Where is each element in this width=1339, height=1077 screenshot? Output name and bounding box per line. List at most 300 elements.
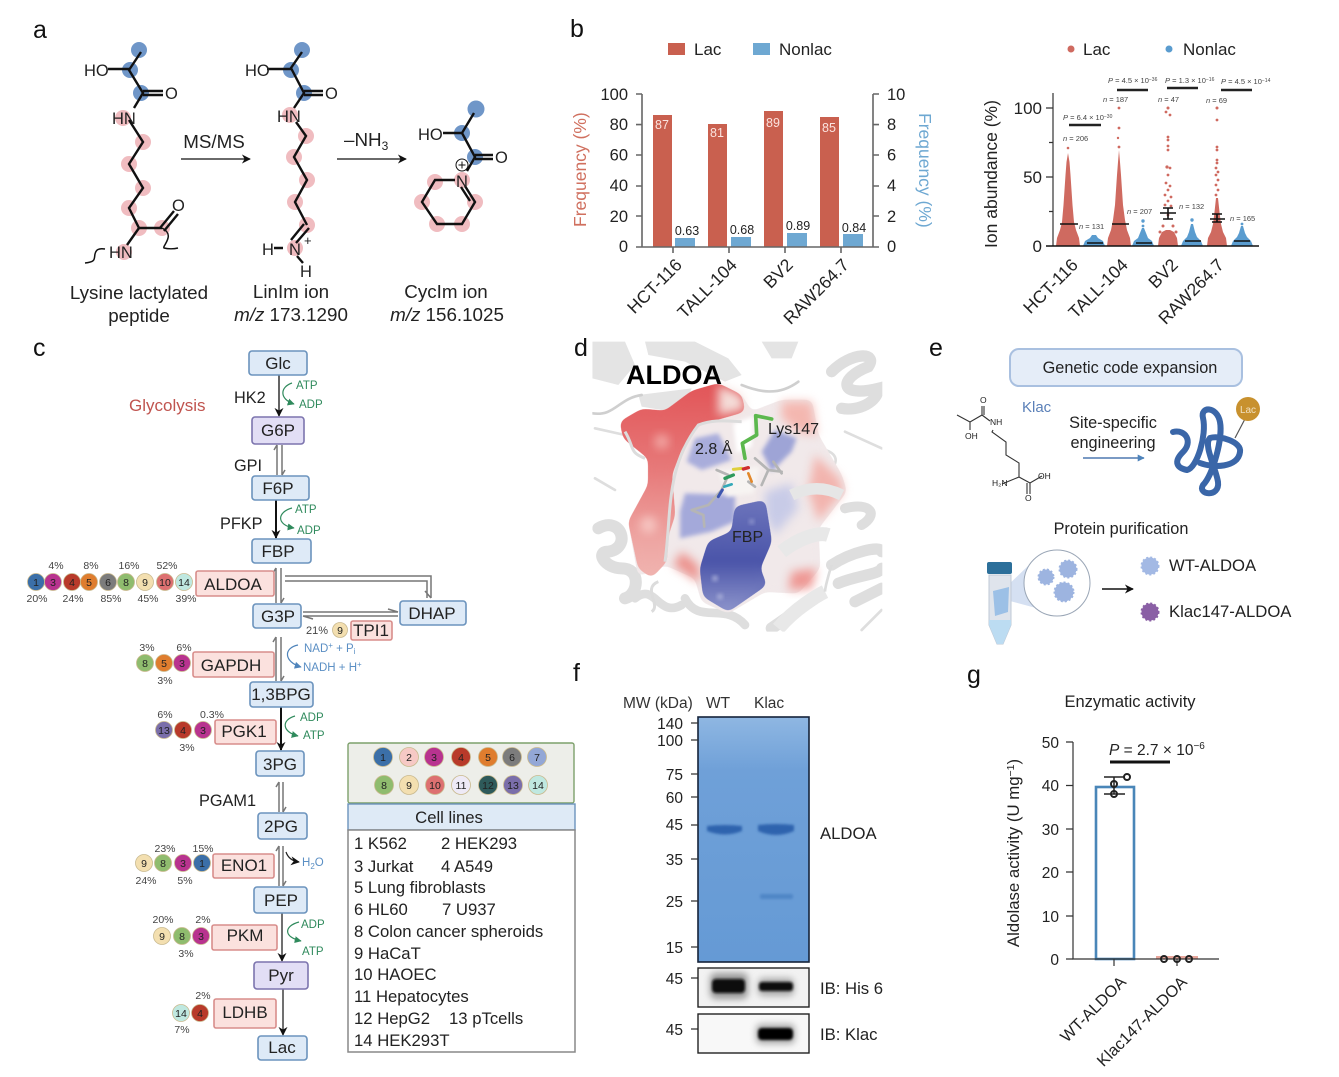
cell lines table: 12 HepG2 (354, 1009, 430, 1028)
ALDOA circle numbers and percentages: 24% (62, 593, 84, 605)
y tick labels: 0 (1050, 952, 1059, 969)
y tick labels (1042, 735, 1059, 969)
blot: His 6 (698, 968, 809, 1007)
n labels (1063, 95, 1255, 231)
x labels: TALL-104 (1064, 255, 1132, 322)
legend: Lac and Nonlac: Lac (694, 40, 722, 59)
cell lines table: 13 pTcells (449, 1009, 523, 1028)
y tick labels: 0 (1033, 237, 1042, 256)
ALDOA circle numbers and percentages: 20% (26, 593, 48, 605)
panel letter g: g (967, 661, 981, 689)
labels: ALDOA and blots (820, 824, 883, 1044)
PGK1 cell-line circles: 0.3% (200, 709, 224, 721)
panel letter f: f (573, 659, 580, 687)
GAPDH cell-line circles (136, 642, 192, 687)
cell lines table: 6 HL60 (354, 900, 408, 919)
label: site-specific engineering (1069, 414, 1157, 452)
P values: P = 4.5 × 10 (1221, 77, 1262, 86)
y tick labels: 50 (1023, 168, 1042, 187)
cell line colour key: 5 (485, 752, 491, 764)
legend: Lac and Nonlac dots (1068, 40, 1236, 59)
icon: tube with magnified protein (987, 550, 1090, 644)
y tick labels: 100 (1014, 99, 1042, 118)
label: LinIm ion: m/z 173.1290 (234, 304, 348, 325)
purple metabolite boxes (252, 417, 308, 989)
ALDOA circle numbers and percentages: 8% (83, 560, 99, 572)
y tick labels: 10 (1042, 909, 1059, 926)
n labels: n = 206 (1063, 134, 1088, 143)
cell line colour key: 12 (482, 780, 494, 792)
cell line colour key: 1 (380, 752, 386, 764)
enzyme names: GPI (234, 457, 262, 475)
cell line colour key: 9 (406, 780, 412, 792)
cofactor labels: 2 (310, 862, 315, 871)
arrow: minus NH3: 3 (382, 139, 389, 153)
label: CycIm ion (390, 281, 504, 325)
molecule: Klac (957, 395, 1051, 503)
cell line colour key: 7 (534, 752, 540, 764)
arrow: MS/MS: MS/MS (183, 131, 245, 152)
red bar value labels: 89 (766, 116, 780, 130)
enzyme names: PFKP (220, 515, 263, 533)
y axis title: −1 (1005, 764, 1017, 776)
protein surface and ribbons (592, 342, 882, 630)
GAPDH cell-line circles: 3 (179, 658, 185, 670)
x labels: BV2 (1144, 255, 1182, 292)
enzyme boxes (193, 571, 392, 1028)
label: site-specific engineering: engineering (1070, 434, 1156, 452)
n labels: n = 69 (1206, 96, 1227, 105)
blue bar value labels (675, 219, 866, 238)
label: site-specific engineering: Site-specific (1069, 414, 1157, 432)
labels: ALDOA and blots: ALDOA (820, 824, 877, 843)
cofactor labels: O (315, 857, 324, 869)
ALDOA cell-line circles (28, 574, 192, 590)
ALDOA circle numbers and percentages: 52% (156, 560, 178, 572)
box labels: Pyr (268, 966, 294, 985)
blot: Klac (698, 1014, 809, 1053)
cofactor labels: H (302, 857, 310, 869)
box labels: G3P (261, 607, 295, 626)
arrow: minus NH3 (337, 129, 406, 159)
red bar value labels: 81 (710, 126, 724, 140)
label: FBP: FBP (732, 529, 763, 546)
PKM cell-line circles (152, 914, 211, 960)
x labels: Klac147-ALDOA (1094, 973, 1191, 1070)
molecule: LinIm ion: H (300, 263, 312, 281)
right axis tick labels (887, 86, 905, 256)
cell line colour key: 6 (509, 752, 515, 764)
cell line colour key: 2 (406, 752, 412, 764)
cell lines table: 2 HEK293 (441, 834, 517, 853)
PKM cell-line circles: 3% (178, 948, 194, 960)
molecule: lysine lactylated peptide: HN (109, 244, 133, 262)
cell line colour key: 14 (532, 780, 544, 792)
box labels: Lac (268, 1038, 296, 1057)
box labels: PEP (264, 891, 298, 910)
left axis tick labels: 20 (610, 208, 628, 226)
molecule: lysine lactylated peptide: O (172, 197, 185, 215)
molecule: lysine lactylated peptide: O (165, 85, 178, 103)
cell lines table: 5 Lung fibroblasts (354, 878, 486, 897)
red swarm points (1056, 106, 1227, 246)
data points and error bars (1104, 774, 1192, 962)
cofactor labels: NADH + H (303, 662, 357, 674)
panel b left: frequency bar chart (570, 15, 935, 328)
panel g: enzymatic activity bar chart (967, 661, 1219, 1070)
P values: −16 (1206, 77, 1215, 83)
PGK1 cell-line circles: 6% (157, 709, 173, 721)
cofactor labels: ATP (303, 730, 325, 742)
molecule: lysine lactylated peptide: HN (112, 110, 136, 128)
left axis tick labels: 0 (619, 238, 628, 256)
cofactor labels: i (354, 647, 356, 656)
labels: ALDOA and blots: IB: His 6 (820, 979, 883, 998)
left axis title: Frequency (%) (570, 112, 590, 227)
header: genetic code expansion: Genetic code expansion (1043, 359, 1217, 377)
x labels: RAW264.7 (1154, 255, 1228, 328)
blue bar value labels: 0.89 (786, 219, 810, 233)
box labels: ALDOA (204, 575, 262, 594)
panel b right: ion abundance scatter (981, 40, 1271, 328)
box labels: PKM (227, 926, 263, 945)
label: lysine lactylated peptide: Lysine lactylated (70, 282, 208, 303)
legend: Lac and Nonlac dots: Lac (1083, 40, 1111, 59)
panel c: glycolysis pathway (26, 334, 575, 1060)
n labels: n = 132 (1179, 202, 1204, 211)
right axis title: Frequency (%) (915, 113, 935, 228)
lane headers: MW (kDa) (623, 695, 693, 712)
TPI1 cell-line circle: 21% (306, 625, 328, 637)
cofactor labels: ADP (297, 525, 321, 537)
molecule: CycIm ion (414, 100, 508, 232)
cell line colour key (348, 743, 574, 803)
x labels: TALL-104 (673, 255, 741, 322)
MW labels: 15 (666, 940, 683, 957)
molecule: LinIm ion: HO (245, 62, 270, 80)
GAPDH cell-line circles: 5 (161, 658, 167, 670)
molecule: lysine lactylated peptide: HO (84, 62, 109, 80)
ALDOA circle numbers and percentages: 5 (86, 577, 92, 589)
cell line colour key: 4 (458, 752, 464, 764)
MW labels: 140 (657, 716, 683, 733)
ENO1 cell-line circles (135, 843, 214, 887)
ENO1 cell-line circles: 8 (160, 858, 166, 870)
molecule: CycIm ion: N (456, 173, 468, 191)
PKM cell-line circles: 8 (179, 931, 185, 943)
box labels: 3PG (263, 755, 297, 774)
cofactor labels: ATP (302, 946, 324, 958)
left axis tick labels: 80 (610, 116, 628, 134)
box labels: 2PG (264, 817, 298, 836)
ENO1 cell-line circles: 15% (192, 843, 214, 855)
left axis tick labels: 60 (610, 146, 628, 164)
label: Lys147: Lys147 (768, 421, 819, 438)
x labels: BV2 (759, 255, 797, 292)
y tick labels: 30 (1042, 822, 1059, 839)
axes (1066, 742, 1219, 966)
enzyme names: HK2 (234, 389, 266, 407)
right axis tick labels: 2 (887, 208, 896, 226)
significance bars (1069, 88, 1252, 125)
WT bar (1096, 787, 1134, 959)
y tick labels: 50 (1042, 735, 1059, 752)
molecule: LinIm ion: O (325, 85, 338, 103)
ALDOA circle numbers and percentages: 45% (137, 593, 159, 605)
right axis tick labels: 4 (887, 177, 896, 195)
y axis title: Aldolase activity (U mg (1004, 776, 1023, 947)
ENO1 cell-line circles: 9 (141, 858, 147, 870)
box labels: TPI1 (353, 621, 389, 640)
PKM cell-line circles: 9 (159, 931, 165, 943)
enzyme names: PGAM1 (199, 792, 256, 810)
ENO1 cell-line circles: 5% (177, 875, 193, 887)
label: lysine lactylated peptide (70, 282, 208, 326)
P values: P = 1.3 × 10 (1165, 76, 1206, 85)
label: protein purification: Protein purification (1054, 520, 1188, 538)
P values: P = 4.5 × 10 (1108, 76, 1149, 85)
cofactor labels: ADP (299, 399, 323, 411)
blue bar value labels: 0.68 (730, 223, 754, 237)
blue bars (675, 233, 863, 247)
ENO1 cell-line circles: 23% (154, 843, 176, 855)
MW ticks (691, 723, 698, 1029)
n labels: n = 165 (1230, 214, 1255, 223)
right axis tick labels: 8 (887, 116, 896, 134)
P values: −14 (1262, 78, 1271, 84)
legend: Lac and Nonlac (668, 40, 832, 59)
Klac147 bar (1156, 956, 1198, 959)
cell line colour key: 11 (456, 780, 467, 792)
TPI1 cell-line circle (306, 622, 348, 638)
y axis title: Ion abundance (%) (981, 100, 1001, 248)
legend: Lac and Nonlac: Nonlac (779, 40, 832, 59)
arrow: engineering (1083, 457, 1144, 459)
label: CycIm ion: CycIm ion (404, 281, 488, 302)
molecule: LinIm ion: N (289, 241, 301, 259)
ALDOA circle numbers and percentages: 16% (118, 560, 140, 572)
molecule: CycIm ion: HO (418, 126, 443, 144)
box labels (201, 354, 456, 1057)
ALDOA circle numbers and percentages: 4 (69, 577, 75, 589)
right axis tick labels: 6 (887, 146, 896, 164)
cell lines table: 9 HaCaT (354, 944, 421, 963)
ENO1 cell-line circles: 1 (199, 858, 205, 870)
PKM cell-line circles: 20% (152, 914, 174, 926)
ALDOA circle numbers and percentages: 8 (123, 577, 129, 589)
ALDOA circle numbers and percentages (26, 560, 197, 605)
panel letter a: a (33, 16, 47, 44)
ALDOA circle numbers and percentages: 1 (33, 577, 39, 589)
MW labels: 25 (666, 894, 683, 911)
MW labels: 60 (666, 790, 683, 807)
label: LinIm ion: LinIm ion (253, 281, 329, 302)
molecule: LinIm ion: HN (277, 108, 301, 126)
P values: −36 (1149, 77, 1158, 83)
cofactor labels: ADP (300, 712, 324, 724)
PGK1 cell-line circles: 3% (179, 742, 195, 754)
red bar value labels: 85 (822, 121, 836, 135)
MW labels: 45 (666, 971, 683, 988)
molecule: LinIm ion (245, 42, 338, 281)
molecule: Klac: OH (1038, 471, 1051, 481)
GAPDH cell-line circles: 6% (176, 642, 192, 654)
cell lines table: 4 A549 (441, 857, 493, 876)
panel letter d: d (574, 334, 588, 362)
panel letter b: b (570, 15, 584, 43)
box labels: LDHB (222, 1003, 268, 1022)
box labels: G6P (261, 421, 295, 440)
PKM cell-line circles: 2% (195, 914, 211, 926)
blue bar value labels: 0.63 (675, 224, 699, 238)
cell lines table: 14 HEK293T (354, 1031, 450, 1050)
Coomassie gel (698, 717, 809, 962)
ALDOA circle numbers and percentages: 85% (100, 593, 122, 605)
ALDOA circle numbers and percentages: 9 (142, 577, 148, 589)
mean and error bars (1060, 208, 1250, 243)
box labels: GAPDH (201, 656, 261, 675)
P values: −30 (1104, 114, 1113, 120)
panel letter c: c (33, 334, 46, 362)
panel e: genetic code expansion workflow (929, 334, 1292, 644)
ALDOA circle numbers and percentages: 14 (178, 577, 190, 589)
label: Klac: Klac (1022, 399, 1052, 416)
cell lines table: 7 U937 (442, 900, 496, 919)
label: distance: 2.8 Å (695, 439, 733, 458)
cell line colour key: 10 (429, 780, 441, 792)
cofactor curves (281, 383, 301, 941)
x labels (1019, 255, 1228, 328)
ALDOA circle numbers and percentages: 4% (48, 560, 64, 572)
GAPDH cell-line circles: 3% (139, 642, 155, 654)
cofactor labels: + (357, 660, 362, 669)
MW labels: 35 (666, 852, 683, 869)
cofactor labels: + (328, 641, 333, 650)
molecule: Klac: NH (990, 417, 1002, 427)
lane headers: WT (706, 695, 731, 712)
cell line colour key: 8 (381, 780, 387, 792)
cell lines table: 3 Jurkat (354, 857, 414, 876)
panel d: ALDOA structure (574, 334, 882, 630)
left axis tick labels (600, 86, 628, 256)
box labels: FBP (261, 542, 295, 561)
ENO1 cell-line circles: 3 (180, 858, 186, 870)
MW labels: 100 (657, 733, 683, 750)
cell lines table (348, 804, 575, 1052)
molecule: LinIm ion: + (304, 233, 312, 248)
cell line colour key: 13 (507, 780, 519, 792)
box labels: ENO1 (221, 856, 267, 875)
molecule: CycIm ion: O (495, 149, 508, 167)
icon: lactylated protein: Lac (1240, 405, 1256, 416)
axes and ticks (636, 94, 879, 253)
GAPDH cell-line circles: 3% (157, 675, 173, 687)
MW labels (657, 716, 683, 1039)
label: LinIm ion (234, 281, 348, 325)
PGK1 cell-line circles: 4 (180, 725, 186, 737)
box labels: PGK1 (221, 722, 267, 741)
molecule: Klac: OH (965, 431, 978, 441)
title: Glycolysis: Glycolysis (129, 396, 206, 415)
cell lines table: 10 HAOEC (354, 965, 437, 984)
GAPDH cell-line circles: 8 (142, 658, 148, 670)
blue swarm points (1083, 218, 1253, 246)
red bar value labels (655, 116, 836, 140)
ALDOA circle numbers and percentages: 6 (105, 577, 111, 589)
labels: ALDOA and blots: IB: Klac (820, 1025, 878, 1044)
x labels: WT-ALDOA (1057, 973, 1130, 1046)
box labels: F6P (262, 479, 294, 498)
chart title: Enzymatic activity (1064, 693, 1196, 711)
cell lines table: 8 Colon cancer spheroids (354, 922, 543, 941)
PGK1 cell-line circles: 3 (200, 725, 206, 737)
header: genetic code expansion (1010, 349, 1242, 386)
box labels: 1,3BPG (251, 685, 311, 704)
y axis title: ) (1004, 759, 1023, 764)
legend: WT-ALDOA: WT-ALDOA (1169, 556, 1257, 575)
MW labels: 45 (666, 1022, 683, 1039)
baseline (1046, 245, 1259, 247)
ALDOA circle numbers and percentages: 3 (50, 577, 56, 589)
right axis tick labels: 10 (887, 86, 905, 104)
ligand and lysine sticks (692, 416, 782, 527)
arrow: purification (1102, 588, 1133, 590)
cell lines table: Cell lines (415, 808, 483, 827)
molecule: lysine lactylated peptide (84, 42, 185, 263)
significance bar and P value: −6 (1193, 741, 1205, 752)
x labels: HCT-116 (623, 255, 686, 317)
panel a: lactylated lysine fragmentation (33, 16, 508, 326)
panel f: gel and immunoblots (573, 659, 883, 1053)
P values: P = 6.4 × 10 (1063, 113, 1104, 122)
cell line colour key: 3 (431, 752, 437, 764)
lane headers (623, 695, 784, 712)
cofactor labels (295, 380, 362, 958)
PGK1 cell-line circles: 13 (158, 725, 170, 737)
surface (620, 383, 847, 613)
LDHB cell-line circles (172, 990, 211, 1036)
y tick labels: 40 (1042, 778, 1059, 795)
cofactor labels: ADP (301, 919, 325, 931)
label: CycIm ion: m/z 156.1025 (390, 304, 504, 325)
metabolite boxes (249, 351, 466, 1060)
y tick labels (1014, 99, 1042, 256)
LDHB cell-line circles: 14 (175, 1008, 187, 1020)
pathway arrows (273, 375, 431, 1035)
arrow: MS/MS (181, 131, 250, 159)
PKM cell-line circles: 3 (198, 931, 204, 943)
cofactor labels: + P (333, 643, 354, 655)
cofactor labels: ATP (296, 380, 318, 392)
n labels: n = 207 (1127, 207, 1152, 216)
x labels: HCT-116 (1019, 255, 1082, 317)
legend: Lac and Nonlac dots: Nonlac (1183, 40, 1236, 59)
red bars (653, 111, 839, 247)
box labels: DHAP (408, 604, 456, 623)
red bar value labels: 87 (655, 118, 669, 132)
cofactor labels: ATP (295, 504, 317, 516)
ALDOA circle numbers and percentages: 10 (159, 577, 171, 589)
PGK1 cell-line circles (156, 709, 224, 754)
LDHB cell-line circles: 2% (195, 990, 211, 1002)
cofactor labels: NAD (304, 643, 328, 655)
cell lines table: 11 Hepatocytes (354, 987, 469, 1006)
label: lysine lactylated peptide: peptide (108, 305, 170, 326)
LDHB cell-line circles: 4 (197, 1008, 203, 1020)
x labels (626, 258, 846, 324)
cell lines table: 1 K562 (354, 834, 407, 853)
ENO1 cell-line circles: 24% (135, 875, 157, 887)
